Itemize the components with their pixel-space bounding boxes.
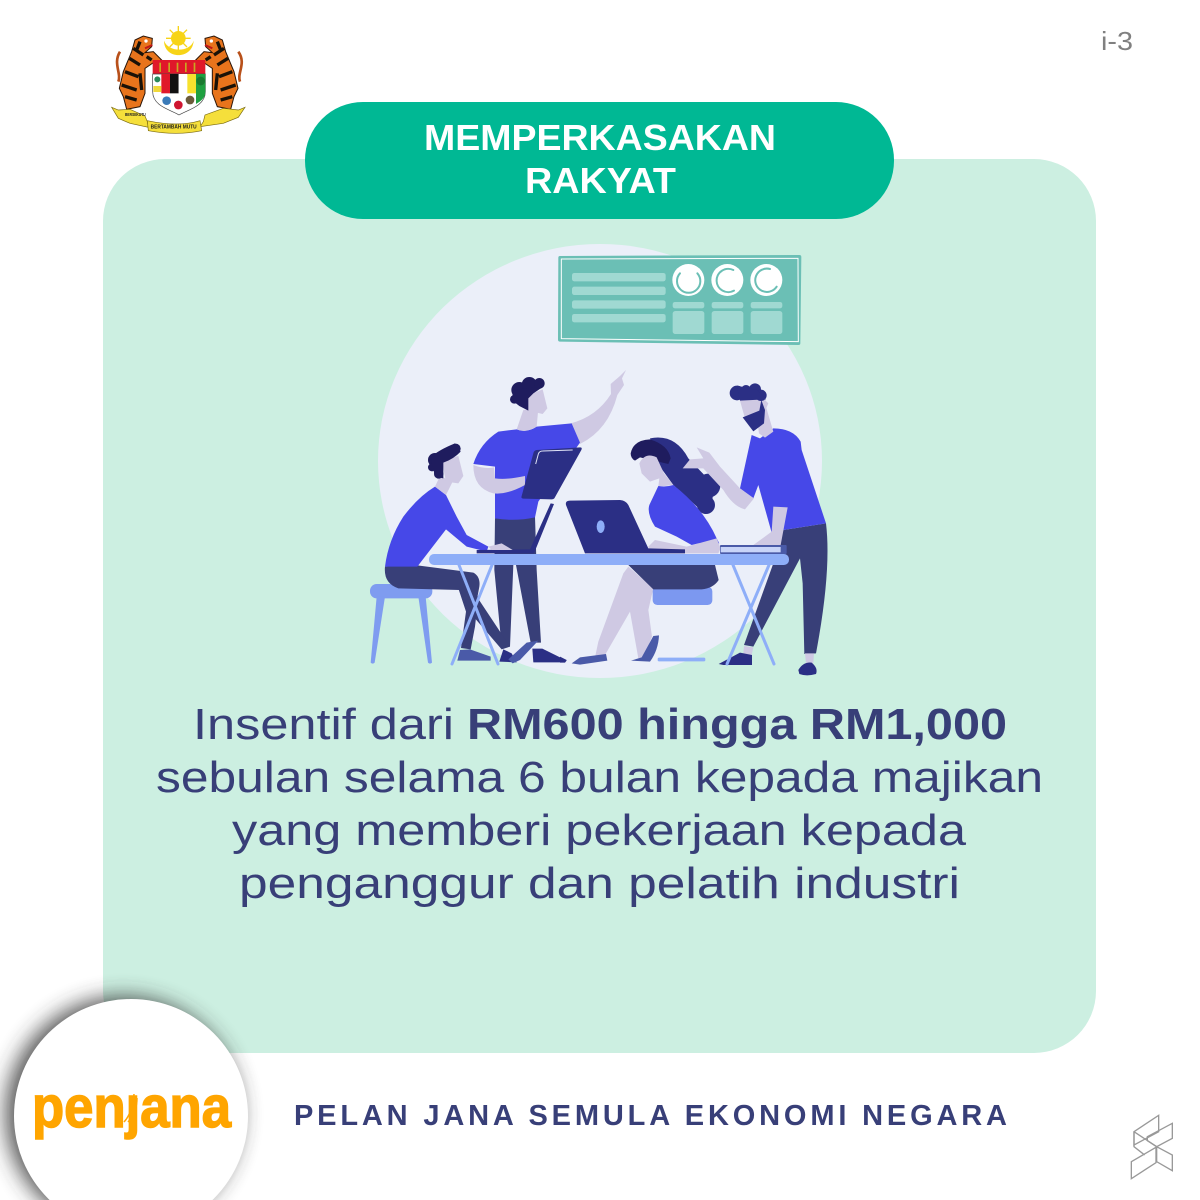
laptop [566,500,685,553]
table [429,554,789,664]
icon: publisher logo [1131,1115,1172,1179]
woman face [639,455,673,487]
dashboard board [558,255,801,345]
icon: Malaysian coat of arms: BERTAMBAH MUTU [151,125,197,131]
left figures [370,377,582,664]
woman torso [649,485,719,545]
right tiger [196,36,238,109]
seated man torso [385,487,488,567]
seated man laptop [477,503,554,553]
heading pill [305,102,894,219]
panel: main green background [103,159,1096,1053]
right man torso and arm [740,428,826,533]
heading pill: MEMPERKASAKAN [424,117,776,158]
main text block: sebulan selama 6 bulan kepada majikan [156,753,1043,802]
right man legs [744,523,828,654]
tablet [521,447,582,499]
main text block: RM600 hingga RM1,000 [467,700,1007,749]
standing man legs [494,517,541,647]
seated man back leg [458,588,478,649]
main text block: penganggur dan pelatih industri [239,859,960,908]
illustration: team at table with dashboard [370,244,828,678]
page number: i-3 [1101,26,1133,56]
main text block: yang memberi pekerjaan kepada [232,806,967,855]
woman seat and skirt [653,587,712,605]
left tiger [119,36,162,109]
main text block [156,700,1043,908]
woman legs [595,567,653,658]
footer tagline: PELAN JANA SEMULA EKONOMI NEGARA [294,1100,1007,1132]
right figures [560,383,828,675]
standing man torso [473,423,580,520]
raised arm of standing man [571,370,626,444]
penjana logo badge [6,997,248,1200]
icon: Malaysian coat of arms [112,26,245,133]
main text block: Insentif dari [193,700,454,749]
seated man thigh [385,565,510,649]
icon: Malaysian coat of arms: BERSEKUTU [125,112,146,117]
penjana logo badge: penjana [32,1075,232,1140]
woman hair [650,437,720,514]
heading pill: RAKYAT [525,160,676,201]
stool [370,584,432,664]
books [720,545,787,554]
background circle [378,244,822,678]
